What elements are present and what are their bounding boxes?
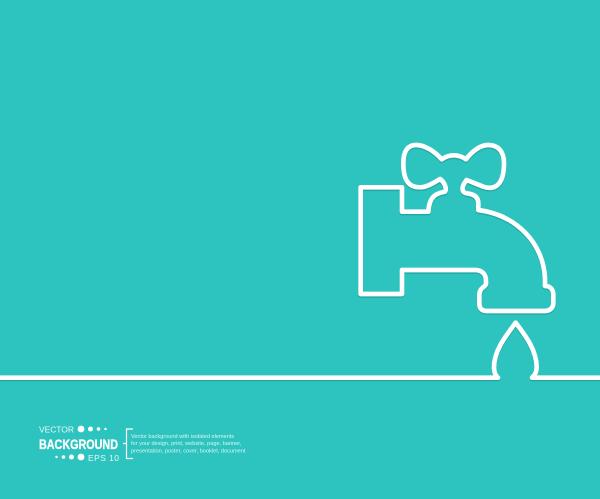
dots top row (78, 426, 107, 432)
description text (131, 434, 246, 454)
label: VECTOR: VECTOR (39, 424, 74, 434)
description text: Vector background with isolated elements (131, 434, 234, 440)
label: BACKGROUND: BACKGROUND (39, 437, 118, 452)
dots bottom row (55, 454, 84, 460)
description text: for your design, print, website, page, banner, (131, 441, 242, 447)
horizontal line with water drop (0, 323, 600, 379)
label: EPS 10: EPS 10 (88, 453, 119, 463)
icon: faucet (361, 145, 553, 312)
description text: presentation, poster, cover, booklet, document (131, 448, 246, 454)
logo block (39, 424, 133, 463)
bracket (123, 429, 133, 458)
